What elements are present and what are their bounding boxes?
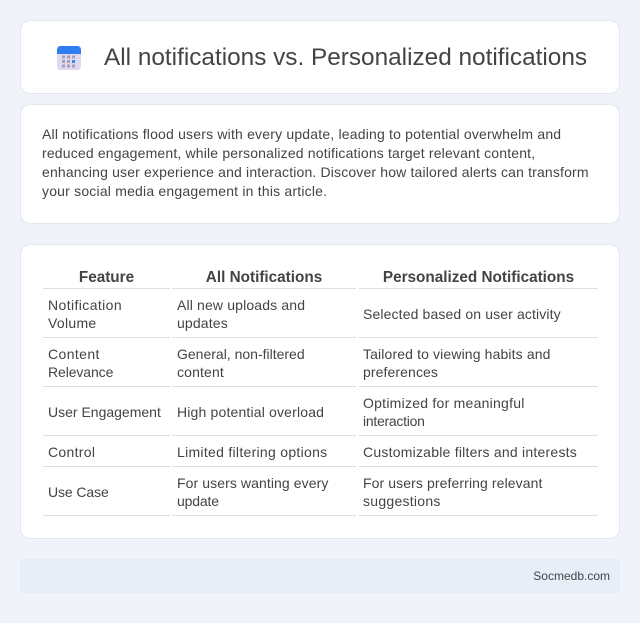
row: Content Relevance: Tailored to viewing habits and <box>363 346 551 362</box>
row: Notification Volume <box>48 297 561 331</box>
footer credit: Socmedb.com <box>533 569 610 583</box>
intro line 3: enhancing user experience and interaction. Discover how tailored alerts can transform <box>42 164 589 180</box>
row: Content Relevance <box>48 346 551 380</box>
row: Control: Customizable filters and interests <box>363 444 577 460</box>
row: Use Case: suggestions <box>363 493 441 509</box>
row: User Engagement: High potential overload <box>177 404 324 420</box>
row: Control: Limited filtering options <box>177 444 327 460</box>
intro line 4: your social media engagement in this article. <box>42 183 327 199</box>
icon: calendar <box>57 46 81 70</box>
comparison table panel <box>20 244 620 539</box>
row: Notification Volume: Notification <box>48 297 122 313</box>
header: Feature: Feature <box>79 269 134 286</box>
row: User Engagement <box>48 395 525 429</box>
header: Personalized Notifications: Personalized Notifications <box>383 269 574 286</box>
row: Content Relevance: content <box>177 364 224 380</box>
row: Notification Volume: All new uploads and <box>177 297 305 313</box>
title: All notifications vs. Personalized notifications <box>104 44 587 71</box>
row: Notification Volume: Volume <box>48 315 96 331</box>
row: Use Case: For users wanting every <box>177 475 328 491</box>
row: Content Relevance: Content <box>48 346 100 362</box>
intro line 1: All notifications flood users with every update, leading to potential overwhelm and <box>42 126 561 142</box>
row: User Engagement: Optimized for meaningful <box>363 395 525 411</box>
intro text panel <box>20 104 620 224</box>
footer bar <box>20 559 620 593</box>
title card <box>20 20 620 94</box>
row: User Engagement: interaction <box>363 413 425 429</box>
row: Control: Control <box>48 444 95 460</box>
row: Use Case: update <box>177 493 219 509</box>
row: Control <box>48 444 577 460</box>
row: Use Case <box>48 475 543 509</box>
row: Content Relevance: General, non-filtered <box>177 346 305 362</box>
row: Notification Volume: Selected based on user activity <box>363 306 561 322</box>
intro line 2: reduced engagement, while personalized notifications target relevant content, <box>42 145 535 161</box>
row: Content Relevance: preferences <box>363 364 438 380</box>
header: All Notifications: All Notifications <box>206 269 322 286</box>
row: Use Case: For users preferring relevant <box>363 475 543 491</box>
row: Notification Volume: updates <box>177 315 228 331</box>
row: Content Relevance: Relevance <box>48 364 113 380</box>
row: User Engagement: User Engagement <box>48 404 161 420</box>
row: Use Case: Use Case <box>48 484 109 500</box>
